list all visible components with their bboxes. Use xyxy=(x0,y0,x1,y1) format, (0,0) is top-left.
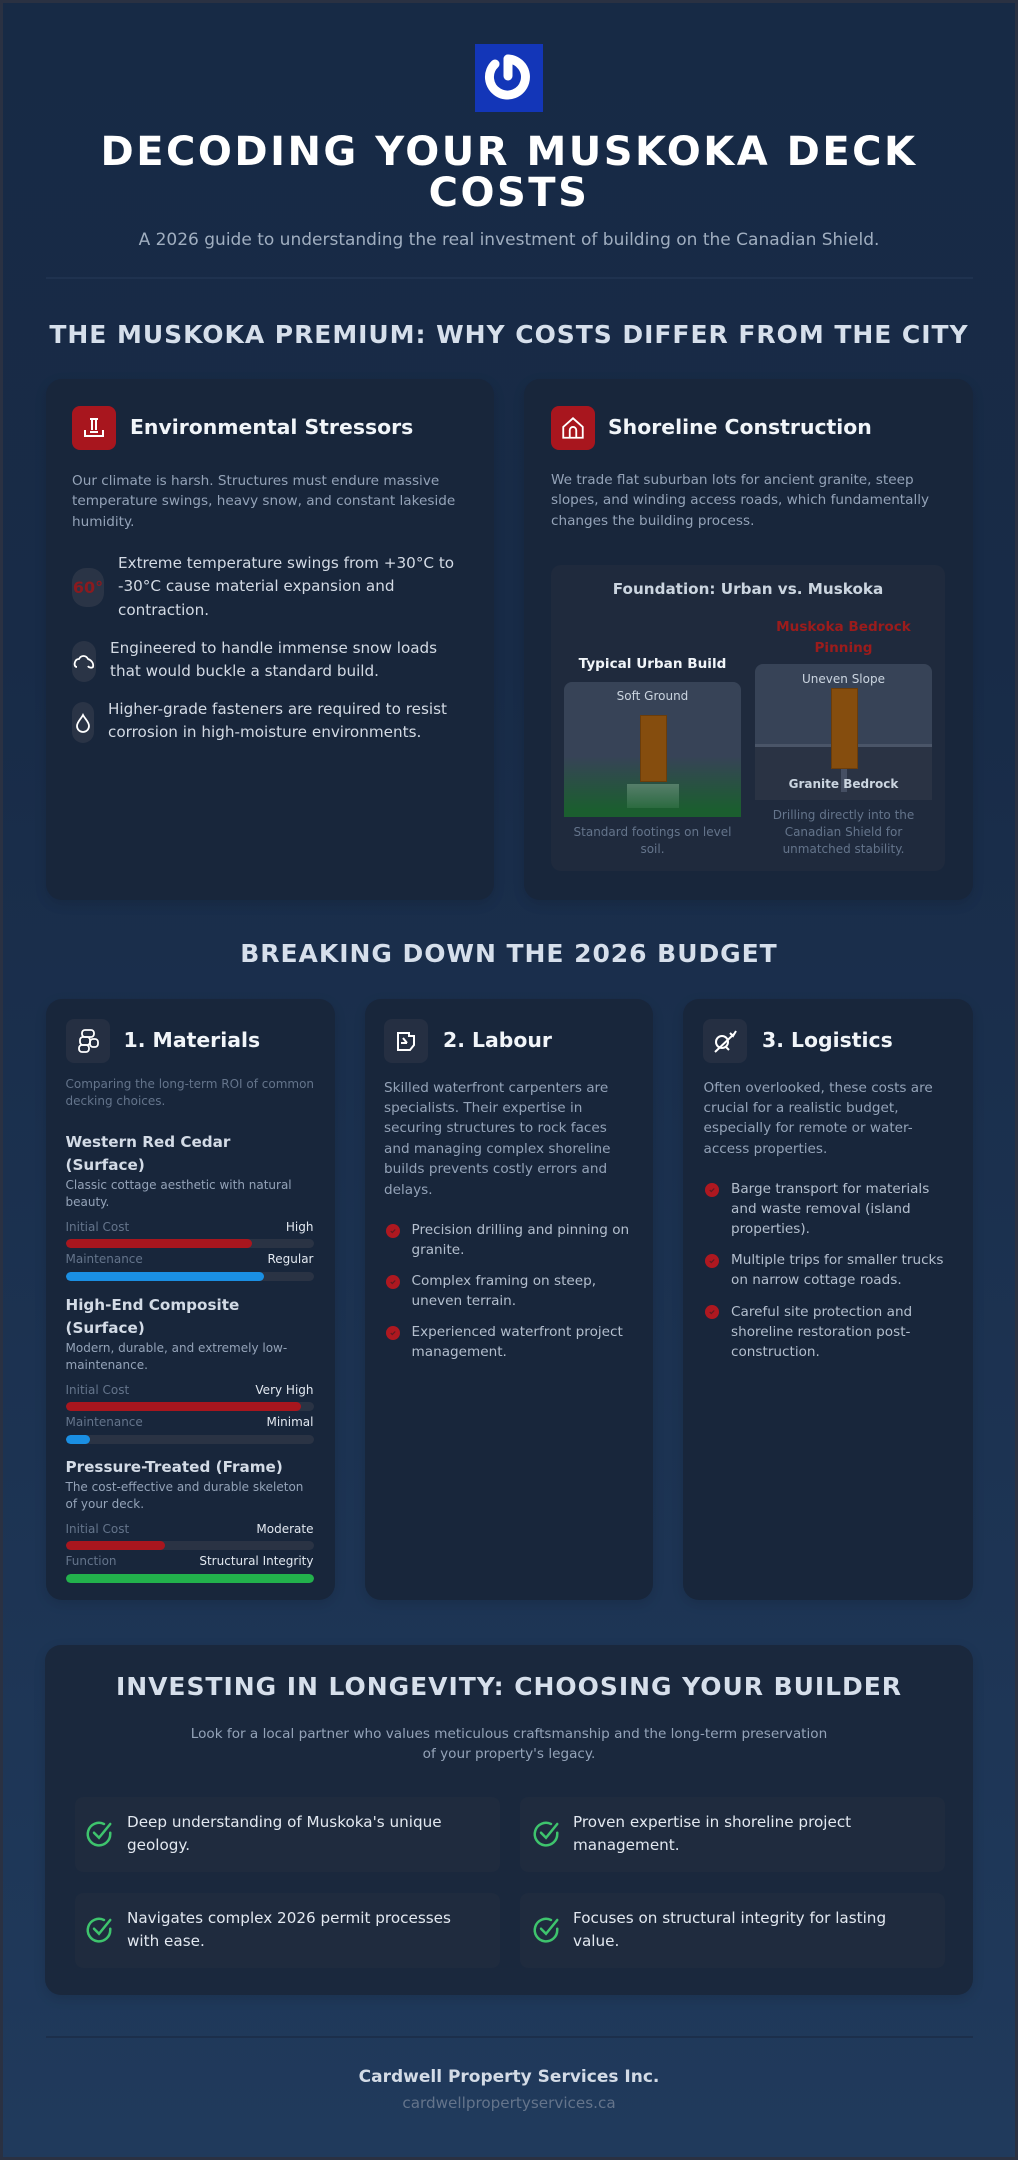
criterion text: Proven expertise in shoreline project xyxy=(573,1812,851,1830)
heading: budget breakdown: BREAKING DOWN THE 2026 BUDGET xyxy=(240,939,778,968)
check bullet xyxy=(705,1183,719,1197)
material description: Classic cottage aesthetic with natural xyxy=(66,1178,292,1192)
function label xyxy=(66,1554,314,1568)
item text xyxy=(412,1324,623,1360)
item text: Barge transport for materials xyxy=(731,1180,929,1196)
stressor: humidity xyxy=(108,700,447,741)
icon: stacked materials xyxy=(66,1019,110,1063)
stressor: temperature: Extreme temperature swings from +30°C to xyxy=(118,554,454,572)
intro text: builds prevents costly errors and xyxy=(384,1161,607,1177)
urban caption: soil. xyxy=(640,842,665,856)
card title: 2. Labour xyxy=(443,1028,552,1052)
intro text: of your property's legacy. xyxy=(423,1746,595,1762)
item text: Careful site protection and xyxy=(731,1304,912,1320)
intro text: Skilled waterfront carpenters are xyxy=(384,1080,608,1096)
stressor: snow: Engineered to handle immense snow loads xyxy=(110,638,437,656)
company name: Cardwell Property Services Inc. xyxy=(359,2067,659,2087)
Muskoka caption: Drilling directly into the xyxy=(773,808,914,822)
intro text: temperature swings, heavy snow, and constant lakeside xyxy=(72,493,455,509)
urban label: Typical Urban Build xyxy=(579,656,726,672)
criterion: shoreline xyxy=(520,1797,945,1872)
Muskoka caption: unmatched stability. xyxy=(783,842,904,856)
panel: environmental stressors xyxy=(46,379,494,900)
item: precision drilling xyxy=(386,1222,629,1258)
icon: snow cloud xyxy=(72,641,96,682)
panel: labour xyxy=(364,999,653,1600)
item: complex framing xyxy=(386,1273,596,1309)
material name: (Surface) xyxy=(66,1156,145,1174)
logo xyxy=(475,44,543,112)
criterion text xyxy=(573,1810,851,1858)
check bullet xyxy=(705,1304,719,1318)
Muskoka foundation illustration xyxy=(755,664,932,800)
item text: Experienced waterfront project xyxy=(412,1324,623,1340)
material: high-end composite xyxy=(66,1296,314,1444)
item text xyxy=(412,1222,629,1258)
stressor: humidity: Higher-grade fasteners are required to resist xyxy=(108,700,447,718)
initial cost bar xyxy=(66,1541,314,1550)
bedrock xyxy=(755,744,932,800)
intro text xyxy=(551,472,929,529)
intro text: Our climate is harsh. Structures must endure massive xyxy=(72,473,439,489)
panel: choosing your builder xyxy=(45,1645,973,1995)
initial cost bar xyxy=(66,1239,314,1248)
maintenance label: Regular xyxy=(267,1252,314,1266)
Muskoka caption: Canadian Shield for xyxy=(785,824,902,838)
maintenance label xyxy=(66,1252,314,1266)
item: barge transport xyxy=(705,1180,929,1237)
title xyxy=(100,129,918,216)
criterion text: management. xyxy=(573,1836,680,1854)
material description: of your deck. xyxy=(66,1497,144,1511)
card title: Environmental Stressors xyxy=(130,415,413,439)
intro text: securing structures to rock faces xyxy=(384,1120,607,1136)
stressor: snow: that would buckle a standard build. xyxy=(110,662,379,680)
criterion text: geology. xyxy=(127,1836,190,1854)
icon: water drop xyxy=(72,702,94,743)
material name: Western Red Cedar xyxy=(66,1133,230,1151)
function label: Structural Integrity xyxy=(199,1554,314,1568)
Muskoka label xyxy=(776,619,911,656)
criterion: integrity xyxy=(520,1893,945,1968)
title: DECODING YOUR MUSKOKA DECK xyxy=(100,129,918,175)
material description xyxy=(66,1178,292,1209)
intro text: Look for a local partner who values meticulous craftsmanship and the long-term preservation xyxy=(191,1726,827,1742)
check bullet xyxy=(386,1224,400,1238)
card title: Shoreline Construction xyxy=(608,415,872,439)
check bullet xyxy=(386,1326,400,1340)
stressor: temperature xyxy=(118,554,454,619)
Muskoka label: Muskoka Bedrock xyxy=(776,619,911,635)
icon: 60 degree swing xyxy=(72,568,104,607)
icon: note xyxy=(384,1019,428,1063)
item text xyxy=(731,1180,929,1237)
subtitle: A 2026 guide to understanding the real investment of building on the Canadian Shield. xyxy=(139,230,879,250)
maintenance bar xyxy=(66,1435,314,1444)
criterion text xyxy=(573,1906,886,1954)
item text: properties). xyxy=(731,1221,810,1237)
intro text: crucial for a realistic budget, xyxy=(704,1100,899,1116)
icon: check xyxy=(531,1819,561,1849)
material description: beauty. xyxy=(66,1195,109,1209)
item text: on narrow cottage roads. xyxy=(731,1272,902,1288)
initial cost label: Initial Cost xyxy=(66,1522,129,1536)
item text: Precision drilling and pinning on xyxy=(412,1222,629,1238)
icon: tools xyxy=(703,1019,747,1063)
item text: construction. xyxy=(731,1344,820,1360)
maintenance label xyxy=(66,1415,314,1429)
maintenance label: Maintenance xyxy=(66,1415,143,1429)
item text: Complex framing on steep, xyxy=(412,1273,596,1289)
post xyxy=(640,715,667,782)
criterion text xyxy=(127,1906,451,1954)
intro text: Often overlooked, these costs are xyxy=(704,1080,933,1096)
intro text: and managing complex shoreline xyxy=(384,1141,611,1157)
initial cost label: Initial Cost xyxy=(66,1383,129,1397)
item text: and waste removal (island xyxy=(731,1201,911,1217)
footer xyxy=(0,2064,1018,2116)
pin xyxy=(841,768,847,792)
intro text xyxy=(191,1726,827,1762)
intro text: Comparing the long-term ROI of common xyxy=(66,1076,314,1090)
intro text xyxy=(72,473,455,530)
item text: shoreline restoration post- xyxy=(731,1324,910,1340)
material name: High-End Composite xyxy=(66,1296,239,1314)
item text xyxy=(412,1273,596,1309)
intro text xyxy=(66,1076,314,1108)
intro text: slopes, and winding access roads, which fundamentally xyxy=(551,492,929,508)
material name: Pressure-Treated (Frame) xyxy=(66,1458,283,1476)
panel: shoreline construction xyxy=(524,379,973,900)
Muskoka caption xyxy=(773,808,914,856)
initial cost bar xyxy=(66,1402,314,1411)
icon: temperature stand xyxy=(72,406,116,450)
material description: The cost-effective and durable skeleton xyxy=(66,1480,303,1494)
initial cost label: Moderate xyxy=(256,1522,314,1536)
item text: uneven terrain. xyxy=(412,1293,516,1309)
criterion text: Focuses on structural integrity for lasting xyxy=(573,1908,886,1926)
material description: maintenance. xyxy=(66,1358,148,1372)
criterion text: with ease. xyxy=(127,1932,205,1950)
intro text: changes the building process. xyxy=(551,513,754,529)
intro text xyxy=(384,1080,611,1198)
intro text: especially for remote or water- xyxy=(704,1120,913,1136)
item text xyxy=(731,1304,912,1360)
card title: 3. Logistics xyxy=(762,1028,893,1052)
criterion text: Deep understanding of Muskoka's unique xyxy=(127,1812,442,1830)
urban foundation illustration xyxy=(564,682,741,817)
maintenance bar xyxy=(66,1272,314,1281)
check bullet xyxy=(386,1275,400,1289)
item: site protection xyxy=(705,1304,912,1360)
item text: management. xyxy=(412,1344,507,1360)
material name xyxy=(66,1133,230,1174)
criterion text: Navigates complex 2026 permit processes xyxy=(127,1908,451,1926)
item text: granite. xyxy=(412,1242,464,1258)
section heading: INVESTING IN LONGEVITY: CHOOSING YOUR BUILDER xyxy=(116,1672,902,1701)
material description xyxy=(65,1480,303,1511)
foundation diagram xyxy=(551,565,945,871)
diagram title: Foundation: Urban vs. Muskoka xyxy=(613,580,883,598)
item: project management xyxy=(386,1324,623,1360)
icon: check xyxy=(84,1915,114,1945)
intro text: specialists. Their expertise in xyxy=(384,1100,582,1116)
material description xyxy=(66,1341,287,1372)
initial cost label: High xyxy=(286,1220,314,1234)
initial cost label xyxy=(66,1383,314,1397)
criterion text: value. xyxy=(573,1932,619,1950)
initial cost label: Very High xyxy=(255,1383,314,1397)
intro text: decking choices. xyxy=(66,1094,165,1108)
title: COSTS xyxy=(429,170,589,216)
bedrock label: Granite Bedrock xyxy=(789,776,898,790)
intro text: We trade flat suburban lots for ancient granite, steep xyxy=(551,472,914,488)
intro text: delays. xyxy=(384,1182,433,1198)
icon: check xyxy=(84,1819,114,1849)
intro text: access properties. xyxy=(704,1141,827,1157)
slope label: Uneven Slope xyxy=(802,672,885,686)
initial cost label xyxy=(66,1522,314,1536)
initial cost label: Initial Cost xyxy=(66,1220,129,1234)
footing xyxy=(627,784,679,808)
function bar xyxy=(66,1574,314,1583)
item text xyxy=(731,1252,944,1288)
criterion: geology xyxy=(75,1797,500,1872)
icon: house xyxy=(551,406,595,450)
item text: Multiple trips for smaller trucks xyxy=(731,1252,944,1268)
stressor: temperature: -30°C cause material expansion and xyxy=(118,577,395,595)
initial cost label xyxy=(66,1220,314,1234)
maintenance label: Maintenance xyxy=(66,1252,143,1266)
item: multiple trips xyxy=(705,1252,944,1288)
material description: Modern, durable, and extremely low- xyxy=(66,1341,287,1355)
urban caption: Standard footings on level xyxy=(574,824,731,838)
intro text: humidity. xyxy=(72,514,134,530)
material: western red cedar xyxy=(66,1133,314,1281)
maintenance label: Minimal xyxy=(266,1415,314,1429)
material name: (Surface) xyxy=(66,1319,145,1337)
material: pressure-treated xyxy=(65,1458,314,1583)
post xyxy=(831,688,858,769)
urban caption xyxy=(574,824,731,856)
function label: Function xyxy=(66,1554,117,1568)
icon: check xyxy=(531,1915,561,1945)
stressor: humidity: corrosion in high-moisture environments. xyxy=(108,723,421,741)
Muskoka label: Pinning xyxy=(814,640,873,656)
criterion: permits xyxy=(75,1893,500,1968)
criterion text xyxy=(127,1810,442,1858)
heading: the Muskoka premium: THE MUSKOKA PREMIUM: WHY COSTS DIFFER FROM THE CITY xyxy=(49,320,969,349)
panel: materials xyxy=(46,999,335,1600)
card title: 1. Materials xyxy=(124,1028,260,1052)
website: cardwellpropertyservices.ca xyxy=(402,2094,616,2112)
intro text xyxy=(704,1080,933,1157)
stressor: snow xyxy=(110,638,437,680)
stressor: temperature: contraction. xyxy=(118,601,209,619)
check bullet xyxy=(705,1254,719,1268)
soft ground label: Soft Ground xyxy=(617,689,688,703)
icon: 60 degree swing: 60° xyxy=(73,578,103,597)
material name xyxy=(66,1296,239,1337)
panel: logistics xyxy=(683,999,973,1600)
